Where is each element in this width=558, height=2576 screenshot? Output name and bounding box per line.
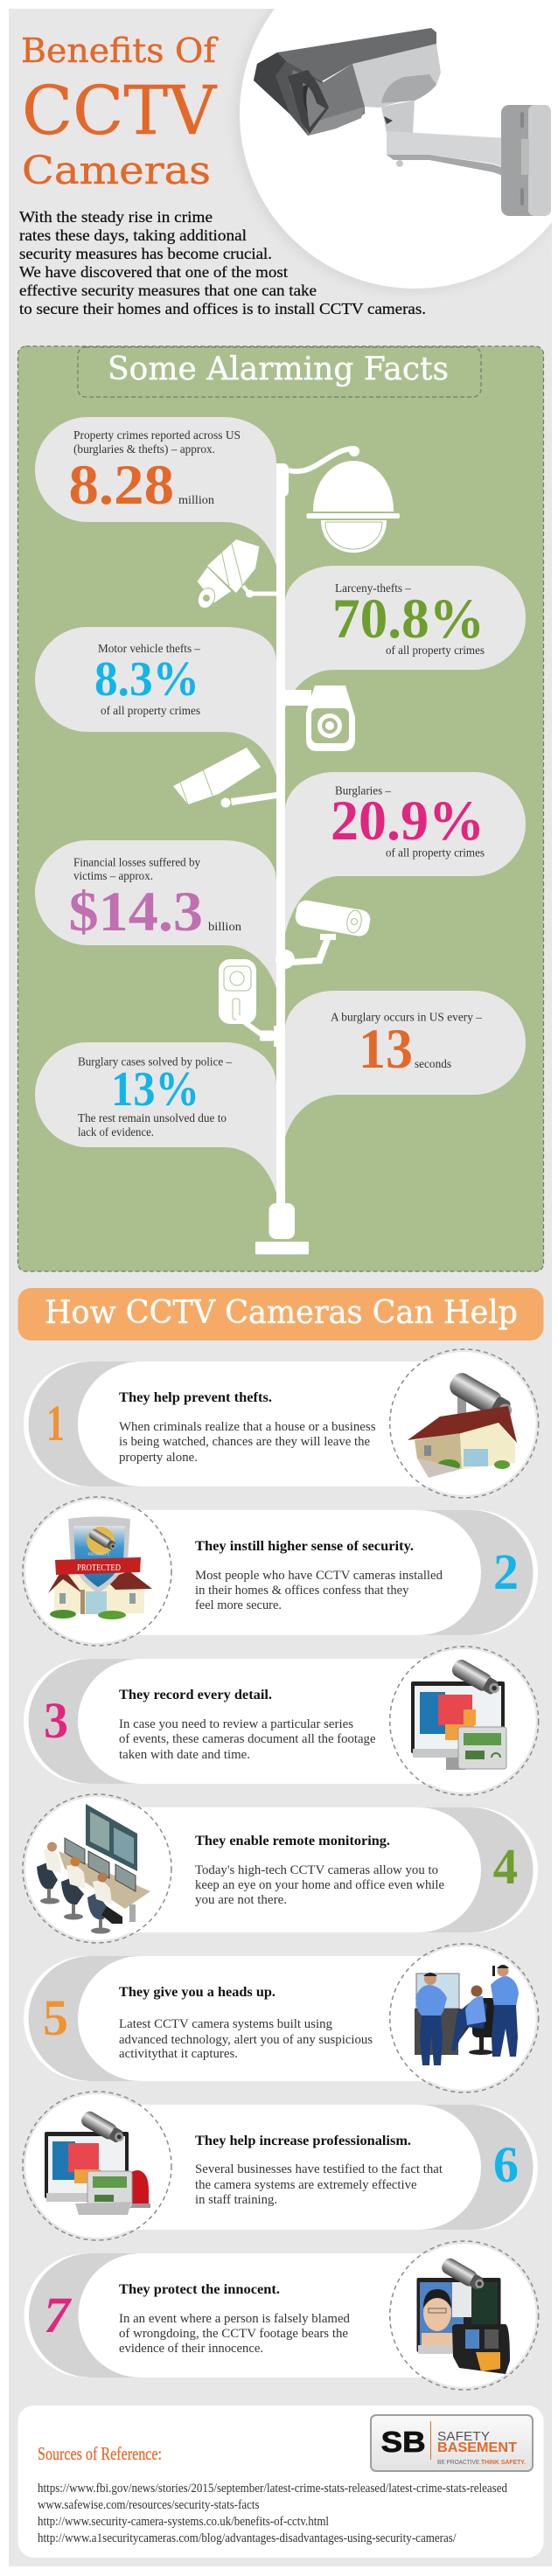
icon: protected house with shield: PROTECTED: [77, 1563, 121, 1573]
bubble: financial losses: [35, 840, 276, 988]
step 1: 1: [46, 1395, 65, 1452]
step 3: They record every detail.: [119, 1688, 272, 1702]
bubble: burglaries: [285, 772, 526, 934]
step 5: advanced technology, alert you of any suspicious: [119, 2033, 373, 2047]
step 6: [23, 2092, 538, 2240]
step 7: evidence of their innocence.: [119, 2342, 263, 2356]
icon: bullet camera: [276, 899, 372, 969]
icon: vertical camera: [219, 959, 276, 1047]
bubble: burglaries: 20.9%: [331, 790, 485, 853]
logo: safety basement: THINK SAFETY.: [481, 2460, 526, 2466]
bubble: burglary every 13 seconds: 13: [359, 1018, 413, 1081]
logo: safety basement: [371, 2415, 533, 2471]
bubble: financial losses: Financial losses suffered by: [73, 857, 200, 869]
source links: http://www.a1securitycameras.com/blog/advantages-disadvantages-using-security-cameras/: [38, 2531, 457, 2545]
step 4: 4: [493, 1838, 518, 1895]
bubble: larceny thefts: Larceny-thefts –: [335, 582, 412, 595]
bubble: motor vehicle thefts: of all property crimes: [101, 705, 200, 718]
icon: long bullet camera: [173, 748, 276, 808]
panel: sources of reference: [17, 2405, 544, 2558]
step 6: 6: [493, 2136, 519, 2193]
icon: house with camera: [408, 1369, 517, 1478]
icon: dome camera: [276, 446, 400, 553]
step 2: [23, 1497, 538, 1646]
bubble: property crimes: 8.28: [68, 454, 174, 517]
source links: [38, 2482, 507, 2545]
intro paragraph: to secure their homes and offices is to install CCTV cameras.: [19, 300, 426, 317]
title: Benefits Of: [21, 31, 219, 70]
step 1: is being watched, chances are they will leave the: [119, 1435, 370, 1449]
step 6: Several businesses have testified to the fact that: [195, 2162, 443, 2176]
intro paragraph: rates these days, taking additional: [19, 226, 247, 244]
step 7: [24, 2241, 539, 2390]
intro paragraph: security measures has become crucial.: [19, 245, 272, 262]
icon: large CCTV camera: [254, 28, 551, 216]
pole with base: [255, 463, 309, 1254]
step 2: in their homes & offices confess that they: [195, 1584, 409, 1598]
step 2: 2: [493, 1543, 519, 1600]
heading banner: how CCTV cameras can help: How CCTV Cameras Can Help: [45, 1295, 518, 1331]
icon: security guards: [415, 1965, 519, 2065]
bubble: burglary every 13 seconds: [285, 991, 526, 1138]
heading: some alarming facts: Some Alarming Facts: [108, 352, 449, 387]
title: Cameras: [22, 149, 211, 193]
icon: protected house with shield: PROPERTY: [87, 1553, 110, 1557]
bubble: larceny thefts: 70.8%: [332, 588, 485, 651]
bubble: larceny thefts: of all property crimes: [386, 644, 485, 658]
step 5: Latest CCTV camera systems built using: [119, 2017, 332, 2031]
step 7: of wrongdoing, the CCTV footage bears the: [119, 2327, 348, 2341]
bubble: motor vehicle thefts: 8.3%: [94, 652, 199, 707]
bubble: property crimes: million: [178, 494, 214, 507]
step 4: Today's high-tech CCTV cameras allow you to: [195, 1863, 438, 1877]
title: [21, 31, 219, 193]
icon: protected house with shield: [48, 1516, 152, 1619]
step 3: taken with date and time.: [119, 1748, 250, 1762]
step 4: you are not there.: [195, 1893, 287, 1907]
step 2: They instill higher sense of security.: [195, 1539, 414, 1554]
icon: control room operators: [37, 1804, 150, 1934]
step 3: 3: [44, 1692, 68, 1749]
bubble: financial losses: billion: [208, 921, 241, 934]
source links: http://www.security-camera-systems.co.uk/benefits-of-cctv.html: [38, 2515, 329, 2529]
logo: safety basement: BASEMENT: [437, 2440, 518, 2455]
title: CCTV: [22, 73, 217, 150]
step 1: When criminals realize that a house or a business: [119, 1420, 376, 1434]
step 5: They give you a heads up.: [119, 1985, 276, 2000]
step 2: Most people who have CCTV cameras installed: [195, 1569, 443, 1583]
bubble: motor vehicle thefts: Motor vehicle thefts –: [98, 643, 201, 656]
step 5: [24, 1944, 539, 2092]
bubble: cases solved by police: The rest remain unsolved due to: [78, 1112, 227, 1125]
step 5: 5: [43, 1989, 68, 2046]
step 7: 7: [44, 2287, 72, 2343]
heading banner: how CCTV cameras can help: [17, 1288, 544, 1340]
step 1: property alone.: [119, 1451, 198, 1465]
logo: safety basement: SB: [381, 2426, 426, 2458]
icon: box camera: [195, 540, 276, 611]
icon: monitor, keypad and siren: [45, 2109, 150, 2215]
step 4: They enable remote monitoring.: [195, 1834, 390, 1848]
intro paragraph: effective security measures that one can take: [19, 282, 317, 299]
heading: some alarming facts: [78, 347, 481, 397]
heading: sources of reference: Sources of Reference:: [38, 2443, 162, 2464]
bubble: cases solved by police: Burglary cases solved by police –: [78, 1056, 233, 1069]
icon: monitor with camera and keypad: [411, 1657, 506, 1770]
icon: wall dome camera: [285, 686, 355, 751]
bubble: motor vehicle thefts: [35, 627, 276, 776]
bubble: cases solved by police: lack of evidence.: [78, 1126, 154, 1139]
step 7: In an event where a person is falsely blamed: [119, 2312, 350, 2326]
step 3: [24, 1647, 539, 1795]
bubble: burglaries: of all property crimes: [386, 846, 485, 860]
bubble: property crimes: (burglaries & thefts) – approx.: [73, 443, 215, 456]
source links: www.safewise.com/resources/security-stats-facts: [38, 2498, 260, 2512]
bubble: burglary every 13 seconds: seconds: [415, 1058, 451, 1071]
bubble: cases solved by police: 13%: [111, 1062, 199, 1117]
intro paragraph: With the steady rise in crime: [19, 208, 213, 226]
panel: some alarming facts: [17, 346, 544, 1271]
step 6: in staff training.: [195, 2193, 277, 2207]
bubble: financial losses: victims – approx.: [73, 870, 153, 883]
bubble: property crimes: Property crimes reported across US: [73, 429, 241, 442]
step 6: They help increase professionalism.: [195, 2134, 411, 2148]
bubble: burglary every 13 seconds: A burglary occurs in US every –: [331, 1011, 483, 1025]
icon: face recognition monitor and terminal: [416, 2256, 510, 2374]
intro paragraph: We have discovered that one of the most: [19, 263, 288, 281]
step 4: keep an eye on your home and office even while: [195, 1878, 444, 1892]
bubble: financial losses: $14.3: [68, 881, 203, 943]
step 3: In case you need to review a particular series: [119, 1717, 353, 1731]
bubble: burglaries: Burglaries –: [335, 785, 392, 797]
bubble: cases solved by police: [35, 1042, 276, 1193]
logo: safety basement: SAFETY: [437, 2429, 490, 2444]
step 4: [23, 1794, 538, 1943]
step 1: [24, 1349, 539, 1498]
step 6: the camera systems are extremely effective: [195, 2178, 417, 2192]
logo: safety basement: BE PROACTIVE.: [437, 2460, 481, 2466]
step 7: They protect the innocent.: [119, 2282, 280, 2297]
step 1: They help prevent thefts.: [119, 1390, 272, 1405]
step 5: activitythat it captures.: [119, 2047, 238, 2061]
bubble: property crimes: [35, 417, 276, 566]
header circle with camera: [234, 0, 558, 293]
step 2: feel more secure.: [195, 1598, 282, 1612]
intro paragraph: [19, 208, 426, 317]
bubble: larceny thefts: [285, 566, 526, 708]
step 3: of events, these cameras document all the footage: [119, 1732, 376, 1746]
